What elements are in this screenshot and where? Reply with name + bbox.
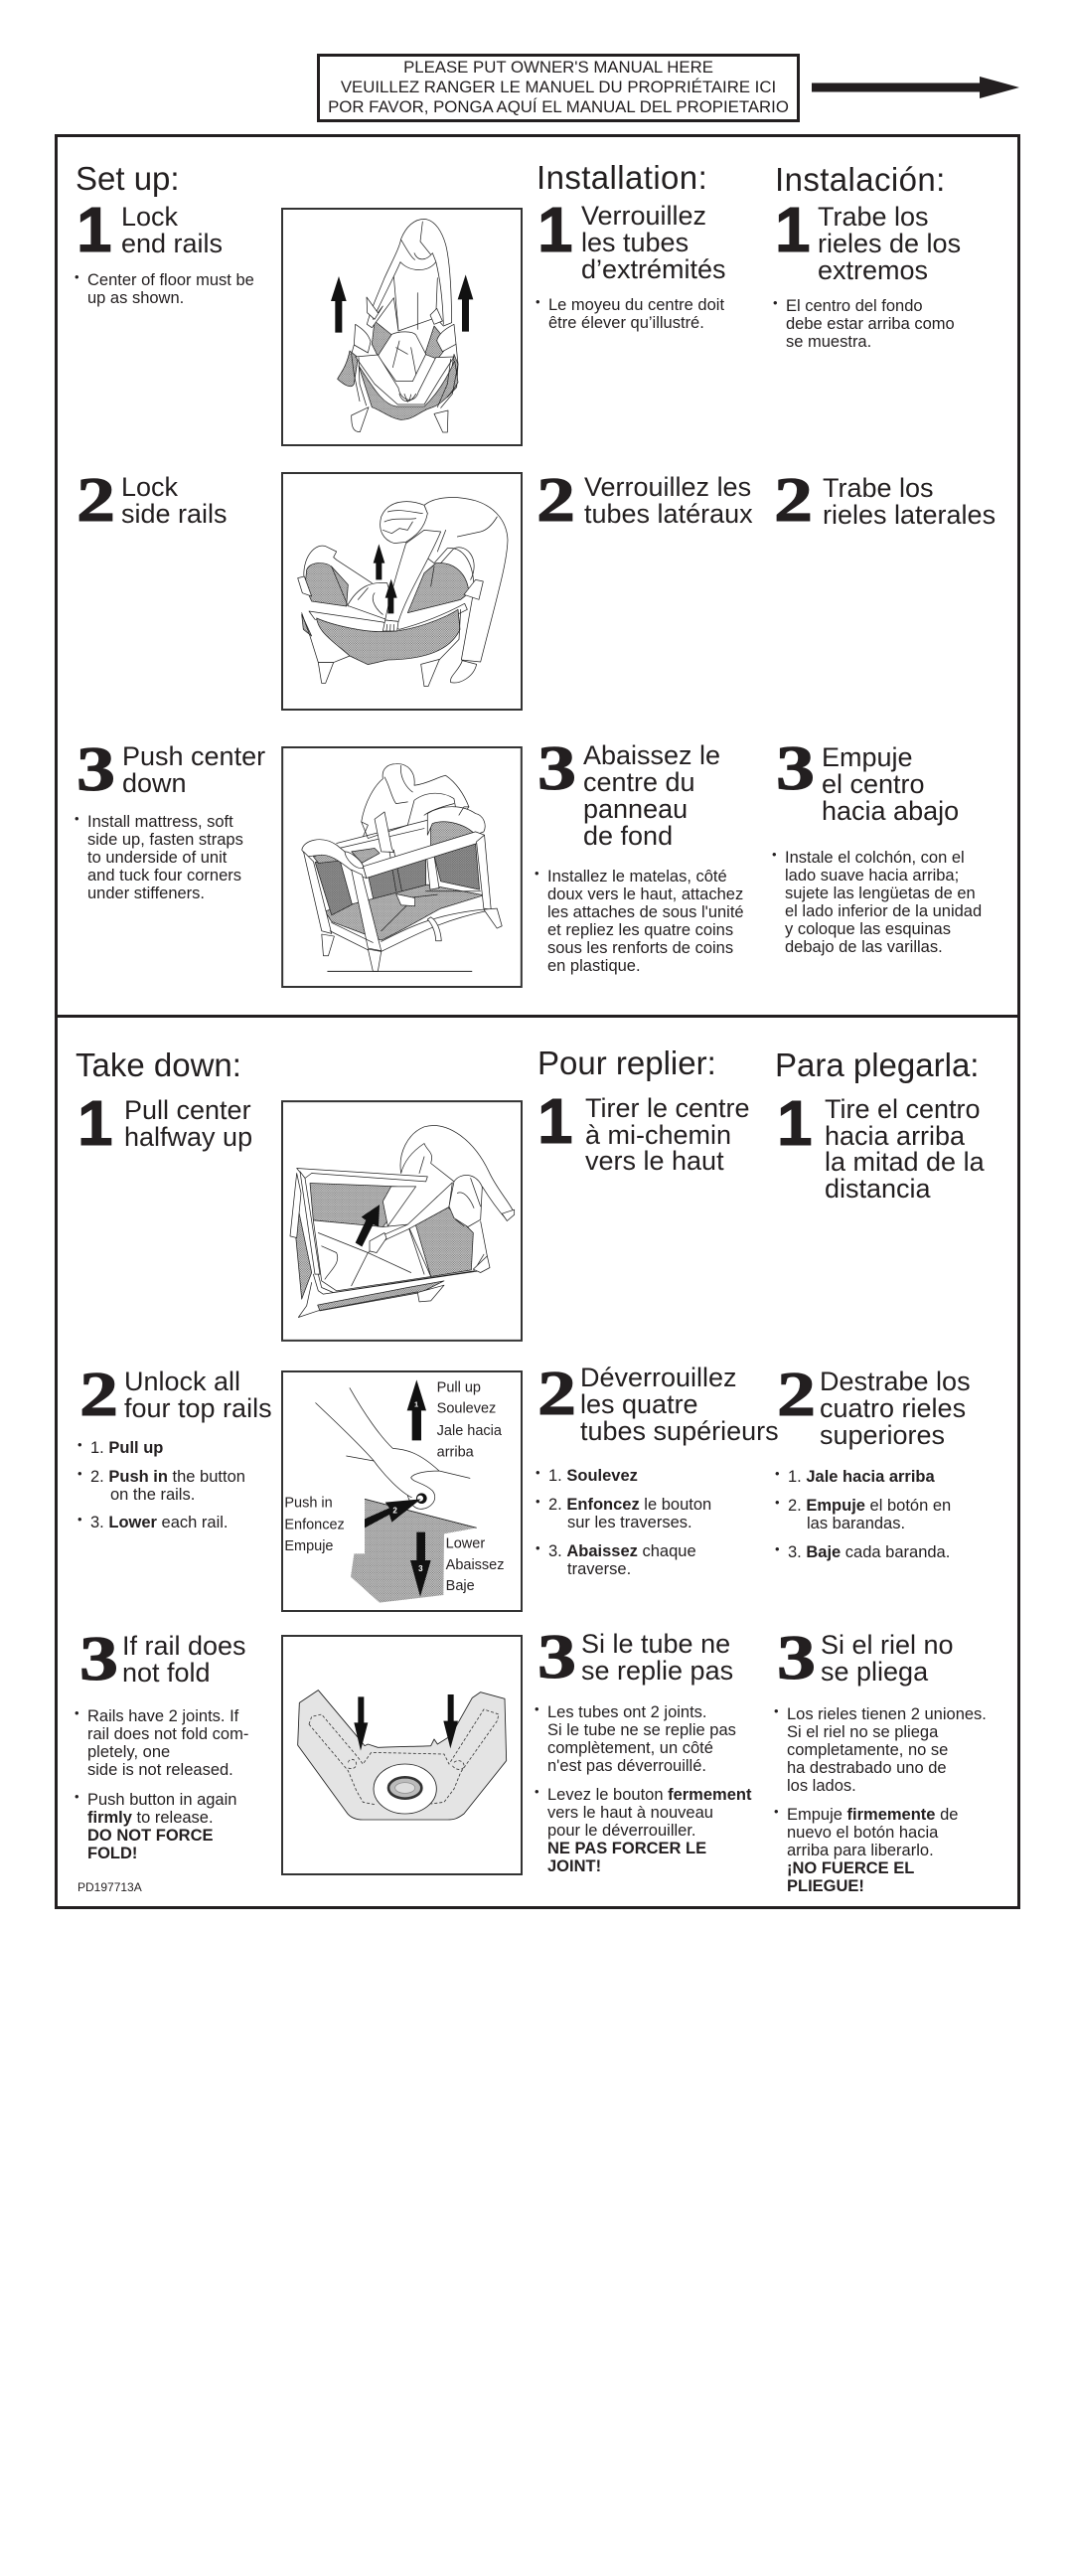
illustration: unlock top rails: 2 — [392, 1506, 397, 1515]
step number 3 take down fr: 3 — [537, 1621, 576, 1691]
list item 3 take down es: 3. Baje cada baranda. — [788, 1543, 950, 1561]
note 3b take down en: Push button in again — [87, 1791, 236, 1809]
part number: PD197713A — [77, 1880, 142, 1894]
illustration: push center down — [281, 746, 523, 988]
text: • — [774, 1804, 779, 1819]
note 3 en: under stiffeners. — [87, 885, 205, 902]
note 3a take down en: pletely, one — [87, 1743, 170, 1761]
step title 1 fr: Verrouillez — [581, 201, 706, 231]
note 1 es — [773, 295, 955, 351]
text: • — [75, 1789, 79, 1804]
note 3 es: y coloque las esquinas — [785, 920, 951, 938]
text: • — [535, 1701, 539, 1716]
list item 2 take down es: 2. Empuje el botón en — [788, 1497, 951, 1515]
text: • — [536, 1540, 540, 1555]
step number 3 take down en: 3 — [79, 1623, 118, 1693]
list item 3 take down fr: traverse. — [567, 1560, 631, 1578]
step title 1 take down en: halfway up — [124, 1122, 252, 1152]
note 1 es: se muestra. — [786, 333, 871, 351]
note 3 fr: en plastique. — [547, 957, 641, 975]
note 1 fr: être élever qu’illustré. — [548, 314, 704, 332]
list item 2 take down fr: sur les traverses. — [567, 1514, 692, 1531]
step title 3 take down en: If rail does — [122, 1631, 246, 1661]
illustration: unlock top rails: Baje — [446, 1578, 475, 1594]
text: • — [77, 1437, 82, 1452]
step title 2 en: Lock — [121, 472, 178, 502]
step number 3 fr: 3 — [537, 732, 576, 803]
step title 1 fr: les tubes — [581, 228, 689, 257]
text: • — [774, 1703, 779, 1718]
note 3 fr: Installez le matelas, côté — [547, 868, 727, 886]
note 3 es: lado suave hacia arriba; — [785, 867, 959, 885]
list item 2 take down es: las barandas. — [807, 1515, 905, 1532]
manual notice box: VEUILLEZ RANGER LE MANUEL DU PROPRIÉTAIRE ICI — [341, 78, 776, 96]
note 3a take down es: ha destrabado uno de — [787, 1759, 947, 1777]
step title 1 take down es: la mitad de la — [825, 1147, 985, 1177]
list item 1 take down fr: 1. Soulevez — [548, 1467, 638, 1485]
step title 1 take down es: Tire el centro — [825, 1094, 981, 1124]
heading: Installation: Installation: — [536, 159, 707, 196]
text: • — [772, 847, 777, 862]
step title 3 es: el centro — [822, 769, 925, 799]
step title 1 fr: d’extrémités — [581, 254, 726, 284]
step title 3 take down fr: Si le tube ne — [581, 1629, 730, 1659]
list item 2 take down es — [775, 1495, 951, 1532]
illustration: unlock top rails: 3 — [418, 1564, 423, 1573]
illustration: lock side rails — [281, 472, 523, 711]
note 3b take down es — [787, 1806, 958, 1895]
note 3a take down en: Rails have 2 joints. If — [87, 1707, 238, 1725]
step title 2 take down es: Destrabe los — [820, 1367, 971, 1396]
note 3a take down en: rail does not fold com- — [87, 1725, 248, 1743]
note 3 fr: et repliez les quatre coins — [547, 921, 733, 939]
illustration: unlock top rails — [281, 1370, 523, 1612]
illustration: unlock top rails: 1 — [414, 1399, 418, 1408]
step title 1 take down es: hacia arriba — [825, 1121, 965, 1151]
note 3a take down fr: Les tubes ont 2 joints. — [547, 1703, 707, 1721]
illustration: unlock top rails: Push in — [284, 1496, 333, 1512]
note 3b take down es: PLIEGUE! — [787, 1877, 864, 1895]
step title 2 take down en: Unlock all — [124, 1367, 240, 1396]
step title 1 take down fr: vers le haut — [585, 1146, 724, 1176]
step title 1 take down es: distancia — [825, 1174, 931, 1204]
step title 3 take down en — [122, 1631, 246, 1688]
text: • — [775, 1495, 780, 1510]
note 3b take down es: Empuje firmemente de — [787, 1806, 958, 1824]
panel: take down frame — [55, 1015, 1020, 1909]
note 1 fr: Le moyeu du centre doit — [548, 296, 724, 314]
text: • — [536, 294, 540, 309]
note 3 es: el lado inferior de la unidad — [785, 902, 982, 920]
illustration: unlock top rails: arriba — [437, 1445, 475, 1461]
step title 2 es: Trabe los — [823, 473, 934, 503]
step title 3 fr: centre du — [583, 767, 695, 797]
manual notice box — [317, 54, 800, 122]
list item 2 take down en: 2. Push in the button — [90, 1468, 245, 1486]
list item 3 take down fr — [536, 1540, 696, 1578]
step title 3 fr: de fond — [583, 821, 673, 851]
note 1 fr — [536, 294, 724, 332]
note 3a take down fr: Si le tube ne se replie pas — [547, 1721, 736, 1739]
step title 1 en — [121, 202, 223, 258]
step number 2 take down en: 2 — [79, 1359, 118, 1429]
text: • — [775, 1466, 780, 1481]
step number 1 take down fr: 1 — [537, 1085, 573, 1157]
step number 2 take down fr: 2 — [537, 1358, 576, 1428]
step number 2 es: 2 — [774, 464, 813, 535]
step number 3 es: 3 — [776, 732, 815, 803]
note 3b take down fr: Levez le bouton fermement — [547, 1786, 751, 1804]
note 3b take down en: DO NOT FORCE — [87, 1827, 213, 1845]
note 3a take down en — [75, 1705, 248, 1779]
note 3a take down es — [787, 1705, 987, 1795]
note 3 en — [75, 811, 243, 902]
step title 3 es — [822, 742, 959, 826]
illustration: unlock top rails: Enfoncez — [284, 1517, 345, 1532]
step title 1 es: rieles de los — [818, 229, 961, 258]
text: • — [75, 811, 79, 826]
note 3b take down en — [75, 1789, 236, 1862]
step title 2 es — [823, 473, 996, 530]
step title 3 take down es — [821, 1632, 954, 1686]
step title 1 take down es — [825, 1094, 985, 1204]
note 3b take down en: firmly to release. — [87, 1809, 214, 1827]
list item 2 take down fr — [536, 1494, 711, 1531]
step title 2 en — [121, 472, 228, 529]
note 3 es: Instale el colchón, con el — [785, 849, 965, 867]
note 3 es — [772, 847, 982, 956]
step title 3 fr: panneau — [583, 794, 688, 824]
text: • — [77, 1466, 82, 1481]
note 3 fr: doux vers le haut, attachez — [547, 886, 743, 903]
illustration: pull center halfway up — [281, 1100, 523, 1342]
step title 3 fr: Abaissez le — [583, 740, 720, 770]
note 3a take down fr — [547, 1703, 736, 1775]
list item 2 take down en — [77, 1466, 245, 1504]
note 3a take down fr: n'est pas déverrouillé. — [547, 1757, 706, 1775]
text: • — [536, 1465, 540, 1480]
note 3 fr: les attaches de sous l'unité — [547, 903, 744, 921]
note 3 en: and tuck four corners — [87, 867, 241, 885]
note 1 en: up as shown. — [87, 289, 184, 307]
note 3a take down en: side is not released. — [87, 1761, 233, 1779]
note 1 en: Center of floor must be — [87, 271, 254, 289]
list item 2 take down fr: 2. Enfoncez le bouton — [548, 1496, 711, 1514]
manual notice box: POR FAVOR, PONGA AQUÍ EL MANUAL DEL PROPIETARIO — [328, 97, 789, 116]
text: • — [536, 1494, 540, 1509]
step title 2 take down fr: Déverrouillez — [580, 1363, 737, 1392]
step title 3 en: down — [122, 768, 187, 798]
step title 2 fr: tubes latéraux — [584, 499, 753, 529]
step title 1 fr — [581, 201, 726, 284]
step title 3 take down fr: se replie pas — [581, 1656, 733, 1686]
panel: set up frame — [55, 134, 1020, 1018]
note 3b take down es: nuevo el botón hacia — [787, 1824, 938, 1842]
note 3b take down fr — [547, 1786, 751, 1875]
step title 1 en: end rails — [121, 229, 223, 258]
step title 1 take down en — [124, 1095, 252, 1152]
note 1 es: debe estar arriba como — [786, 315, 955, 333]
step title 2 take down fr — [580, 1363, 779, 1446]
step title 1 take down fr: Tirer le centre — [585, 1093, 750, 1123]
step title 1 take down en: Pull center — [124, 1095, 251, 1125]
text: • — [77, 1512, 82, 1527]
step title 1 en: Lock — [121, 202, 178, 232]
manual notice box: PLEASE PUT OWNER'S MANUAL HERE — [403, 58, 713, 77]
note 3b take down fr: vers le haut à nouveau — [547, 1804, 713, 1822]
step title 1 es: Trabe los — [818, 202, 929, 232]
step title 2 take down es: superiores — [820, 1420, 945, 1450]
step title 1 es: extremos — [818, 255, 928, 285]
step title 3 take down es: se pliega — [821, 1657, 928, 1687]
step title 3 es: hacia abajo — [822, 796, 959, 826]
step title 3 fr — [583, 740, 720, 851]
text: • — [535, 1784, 539, 1799]
text: • — [75, 269, 79, 284]
step title 1 take down fr: à mi-chemin — [585, 1120, 731, 1150]
illustration: unlock top rails: Empuje — [284, 1538, 334, 1554]
illustration: unlock top rails: Lower — [446, 1535, 485, 1551]
heading: Instalacion: Instalación: — [775, 161, 946, 198]
text: • — [773, 295, 778, 310]
step number 2 fr: 2 — [536, 464, 575, 535]
step number 3 en: 3 — [77, 733, 115, 804]
step number 1 es: 1 — [775, 194, 811, 265]
step title 2 take down es: cuatro rieles — [820, 1393, 966, 1423]
step number 1 take down es: 1 — [777, 1087, 813, 1159]
note 3b take down en: FOLD! — [87, 1845, 137, 1862]
step number 3 take down es: 3 — [777, 1622, 816, 1692]
illustration: unlock top rails: Pull up — [437, 1380, 481, 1396]
note 3a take down es: Los rieles tienen 2 uniones. — [787, 1705, 987, 1723]
step title 1 es — [818, 202, 961, 285]
step number 2 take down es: 2 — [777, 1359, 816, 1429]
list item 1 take down en: 1. Pull up — [90, 1439, 163, 1457]
step title 2 es: rieles laterales — [823, 500, 996, 530]
note 3 en: side up, fasten straps — [87, 831, 243, 849]
note 3a take down es: Si el riel no se pliega — [787, 1723, 938, 1741]
heading: Pour replier: Pour replier: — [537, 1045, 716, 1081]
step title 1 take down fr — [585, 1093, 750, 1176]
note 3b take down fr: JOINT! — [547, 1857, 601, 1875]
step title 2 fr: Verrouillez les — [584, 472, 751, 502]
step title 3 take down en: not fold — [122, 1658, 211, 1688]
note 3 en: Install mattress, soft — [87, 813, 233, 831]
heading: Take down: Take down: — [76, 1046, 241, 1083]
step title 3 take down fr — [581, 1629, 733, 1686]
step number 1 en: 1 — [77, 194, 112, 265]
note 3 en: to underside of unit — [87, 849, 227, 867]
illustration: unlock top rails: Soulevez — [437, 1401, 496, 1417]
note 1 en — [75, 269, 254, 307]
note 3 fr: sous les renforts de coins — [547, 939, 733, 957]
note 3a take down fr: complètement, un côté — [547, 1739, 713, 1757]
note 3a take down es: completamente, no se — [787, 1741, 948, 1759]
step number 1 fr: 1 — [537, 194, 573, 265]
step title 2 take down fr: tubes supérieurs — [580, 1416, 779, 1446]
step title 2 en: side rails — [121, 499, 228, 529]
list item 2 take down en: on the rails. — [110, 1486, 195, 1504]
note 3b take down fr: pour le déverrouiller. — [547, 1822, 695, 1840]
step title 2 take down en: four top rails — [124, 1393, 272, 1423]
step title 2 take down fr: les quatre — [580, 1389, 698, 1419]
text: • — [75, 1705, 79, 1720]
step title 3 es: Empuje — [822, 742, 913, 772]
note 3a take down es: los lados. — [787, 1777, 856, 1795]
heading: Set up: Set up: — [76, 160, 180, 197]
step title 2 fr — [584, 472, 753, 529]
step title 2 take down en — [124, 1367, 272, 1423]
arrow: to the right — [812, 77, 1019, 98]
note 3b take down es: ¡NO FUERCE EL — [787, 1859, 914, 1877]
text: • — [775, 1541, 780, 1556]
note 3 es: debajo de las varillas. — [785, 938, 943, 956]
text: • — [535, 866, 539, 881]
step title 3 en: Push center — [122, 741, 265, 771]
list item 3 take down fr: 3. Abaissez chaque — [548, 1542, 696, 1560]
illustration: lock end rails — [281, 208, 523, 446]
step title 3 take down es: Si el riel no — [821, 1630, 954, 1660]
step number 1 take down en: 1 — [77, 1087, 113, 1159]
step number 2 en: 2 — [77, 464, 115, 535]
illustration: unlock top rails: Jale hacia — [437, 1423, 503, 1439]
list item 3 take down en: 3. Lower each rail. — [90, 1514, 229, 1531]
illustration: rail button — [281, 1635, 523, 1875]
step title 2 take down es — [820, 1367, 971, 1450]
list item 1 take down es: 1. Jale hacia arriba — [788, 1468, 935, 1486]
heading: Para plegarla: Para plegarla: — [775, 1046, 979, 1083]
note 3 fr — [535, 866, 744, 975]
note 3 es: sujete las lengüetas de en — [785, 885, 976, 902]
note 3b take down es: arriba para liberarlo. — [787, 1842, 934, 1859]
note 3b take down fr: NE PAS FORCER LE — [547, 1840, 706, 1857]
note 1 es: El centro del fondo — [786, 297, 923, 315]
illustration: unlock top rails: Abaissez — [446, 1557, 505, 1573]
step title 3 en — [122, 741, 265, 798]
